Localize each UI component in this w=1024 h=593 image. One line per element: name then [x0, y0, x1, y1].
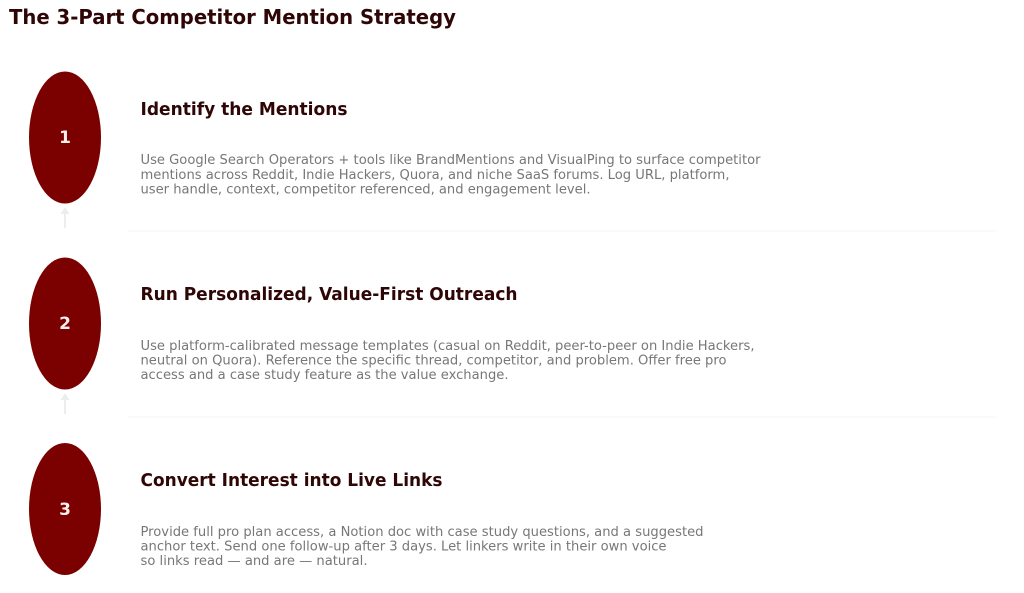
text block: step 3 description: so links read — and are — natural. [140, 554, 368, 569]
text block: step 1 description: Use Google Search Operators + tools like BrandMentions and VisualPing to surface competitor [140, 153, 761, 168]
icon: step 2 number oval: 2 [59, 314, 71, 334]
icon: step 3 number oval: 3 [59, 500, 71, 520]
text block: step 1 description: user handle, context, competitor referenced, and engagement level. [140, 182, 590, 198]
text block: step 2 description: access and a case study feature as the value exchange. [140, 368, 508, 383]
text block: step 1 description [140, 153, 761, 198]
text block: step 2 description [140, 339, 754, 383]
heading: step 2: Run Personalized, Value-First Outreach [140, 285, 518, 305]
panel: step 1 [29, 72, 761, 228]
arrow: step 1 connector [60, 207, 70, 228]
heading: step 3: Convert Interest into Live Links [140, 471, 442, 491]
arrow: step 2 connector [60, 393, 70, 414]
text block: step 3 description: Provide full pro plan access, a Notion doc with case study questions, and a suggested [140, 525, 704, 540]
icon: step 1 number oval: 1 [59, 128, 71, 148]
text block: step 3 description: anchor text. Send one follow-up after 3 days. Let linkers write in their own voice [140, 540, 666, 554]
heading: step 1: Identify the Mentions [140, 100, 348, 120]
text block: step 1 description: mentions across Reddit, Indie Hackers, Quora, and niche SaaS forums. Log URL, platform, [140, 168, 730, 183]
text block: step 2 description: neutral on Quora). Reference the specific thread, competitor, and problem. Offer free pro [140, 354, 727, 368]
panel: step 2 [29, 258, 754, 414]
title: The 3-Part Competitor Mention Strategy [9, 5, 456, 29]
icon: step 1 number oval [29, 72, 101, 204]
text block: step 3 description [140, 525, 704, 569]
text block: step 2 description: Use platform-calibrated message templates (casual on Reddit, peer-to-peer on Indie Hackers, [140, 339, 754, 354]
icon: step 3 number oval [29, 443, 101, 575]
icon: step 2 number oval [29, 258, 101, 390]
panel: step 3 [29, 443, 704, 575]
